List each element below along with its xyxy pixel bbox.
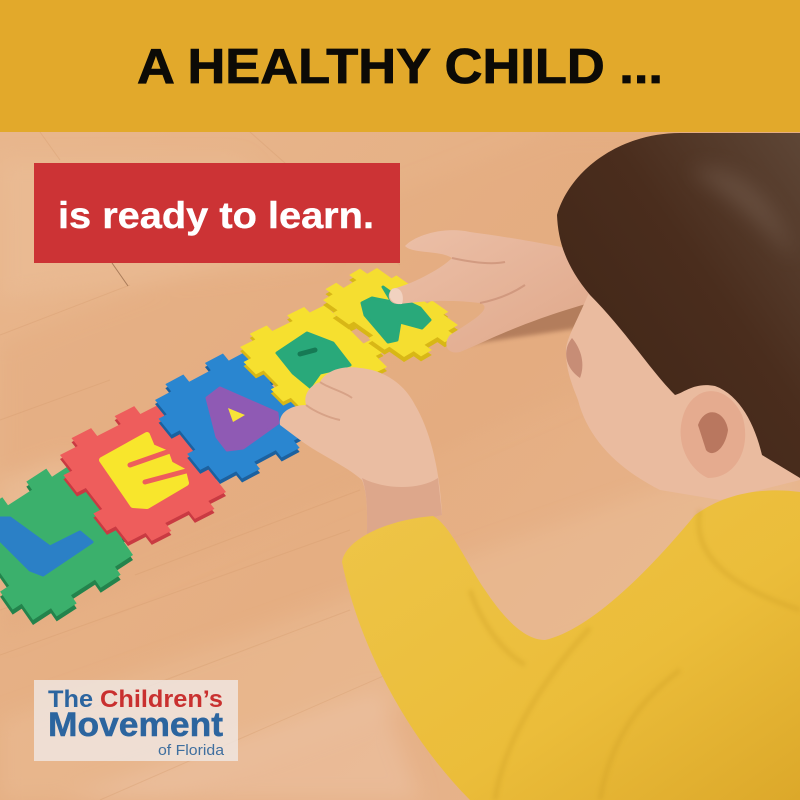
- logo: The Children's Movement of Florida: Movement: [48, 706, 223, 744]
- logo: The Children's Movement of Florida: of Florida: [158, 742, 225, 759]
- title band: [0, 0, 800, 132]
- child's hair: [557, 133, 800, 478]
- puzzle piece: L (green): [0, 451, 148, 639]
- child's yellow shirt: [342, 490, 800, 800]
- shadow under right hand: [465, 290, 600, 345]
- logo: The Children's Movement of Florida: [34, 680, 238, 761]
- puzzle piece: E (red): [45, 393, 241, 558]
- puzzle piece: A (blue): [141, 340, 324, 496]
- red callout: is ready to learn.: [58, 195, 374, 236]
- child's right hand on N tile: [389, 230, 600, 353]
- puzzle piece: N (yellow): [311, 260, 470, 370]
- child's left hand on A tile: [280, 367, 442, 535]
- puzzle piece: R (yellow): [227, 296, 400, 422]
- logo: The Children's Movement of Florida: The Children’s: [48, 686, 223, 713]
- title band: A HEALTHY CHILD ...: [137, 40, 663, 94]
- red callout: [34, 163, 400, 263]
- child's head: face and ear: [566, 260, 800, 500]
